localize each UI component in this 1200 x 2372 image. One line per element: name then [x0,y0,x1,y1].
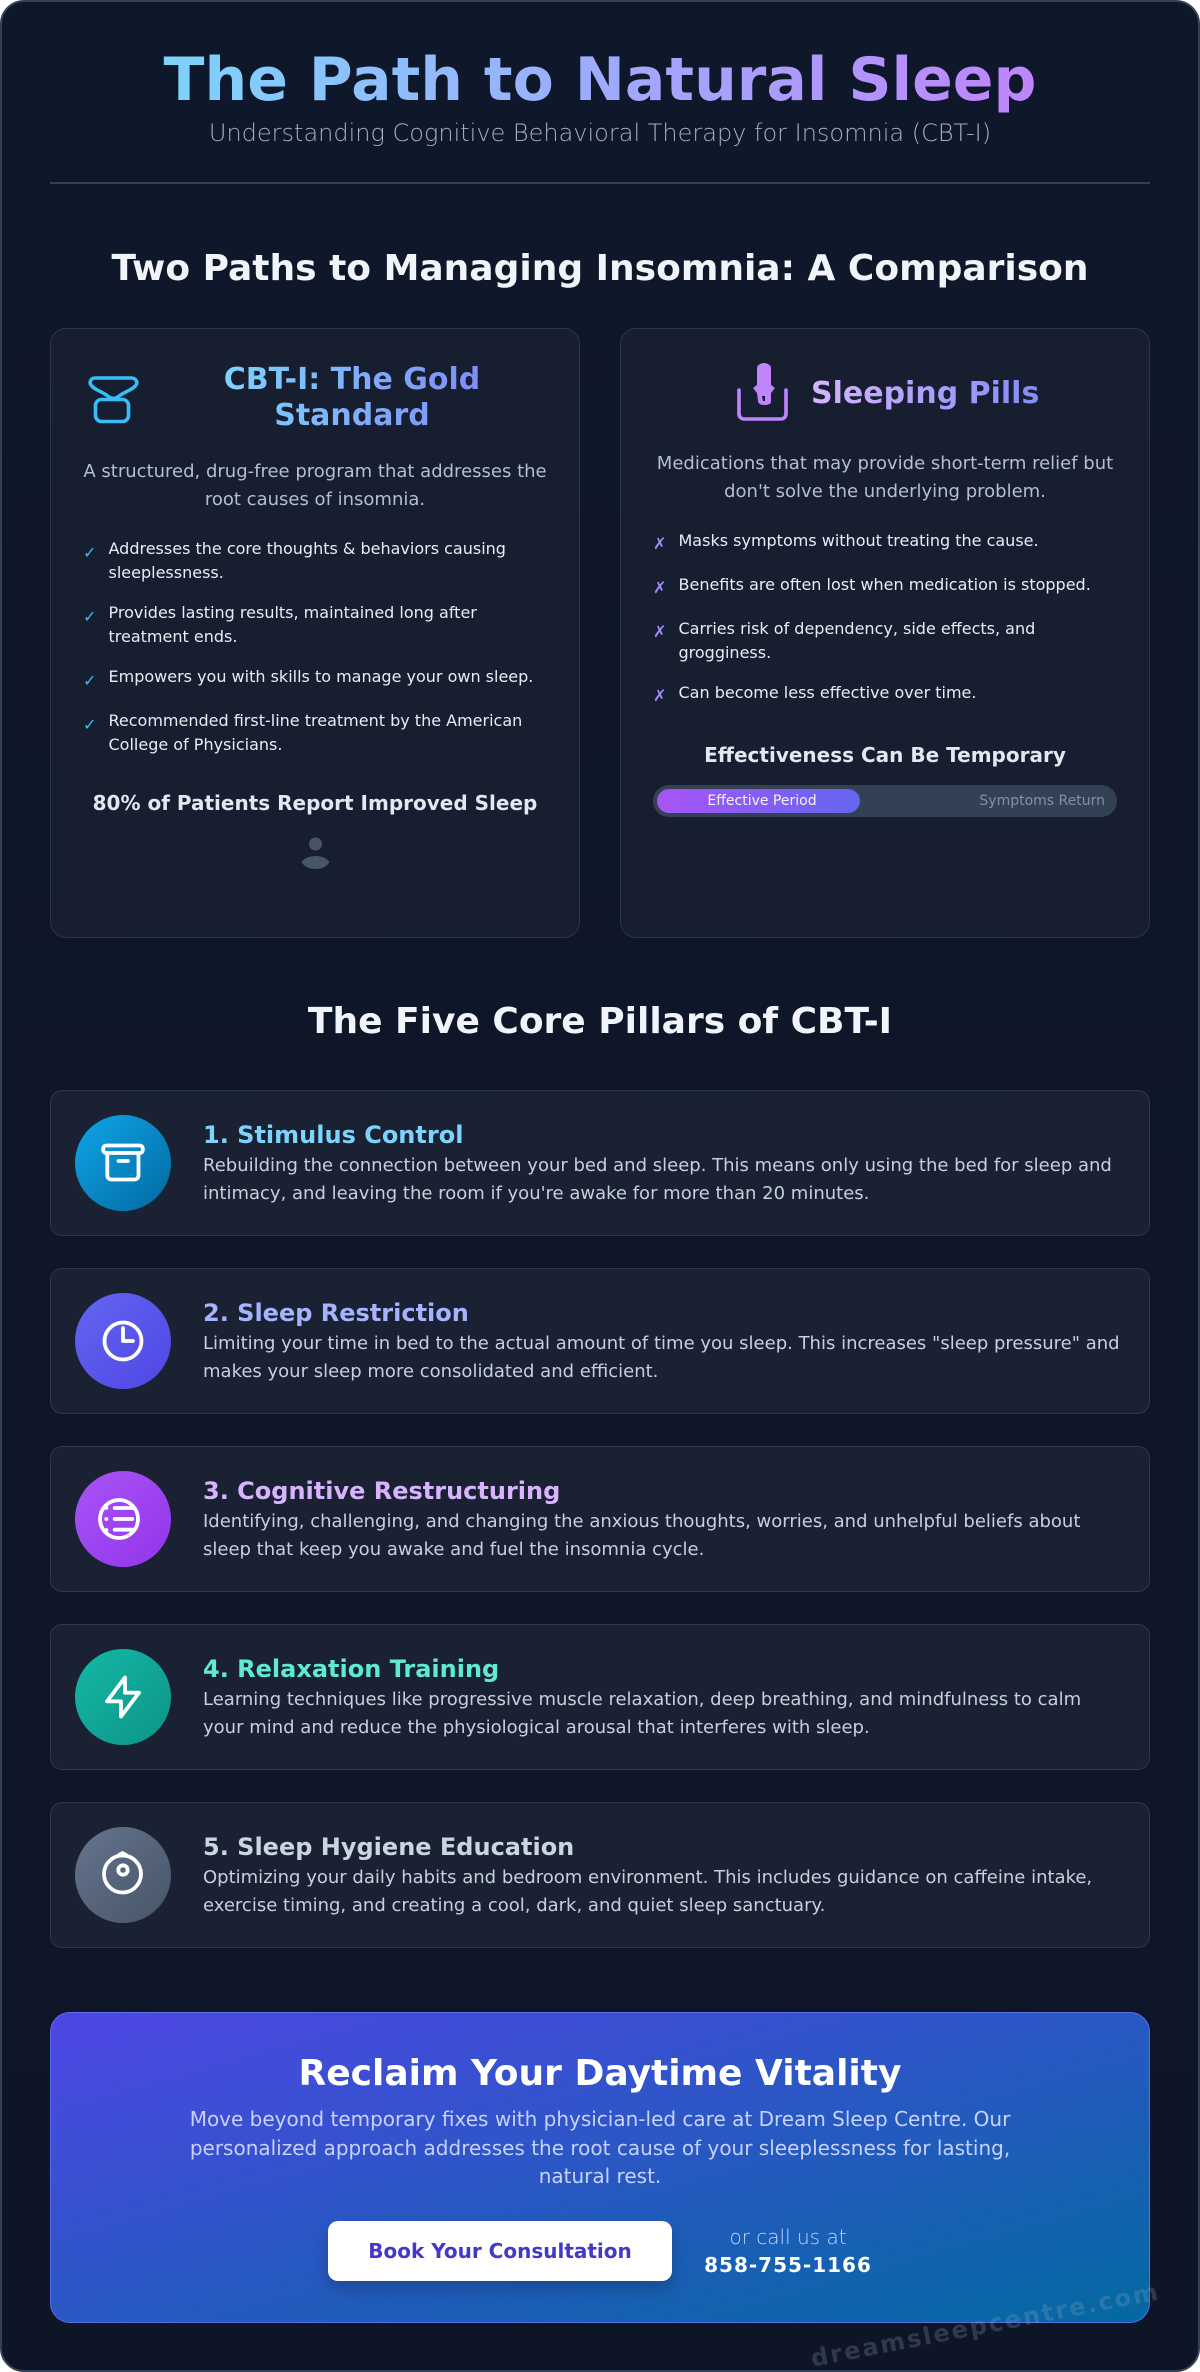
pillar 4 [50,1624,1150,1770]
icon: thought list [75,1471,171,1567]
pillar 1 text [203,1155,1112,1204]
CTA text: natural rest. [539,2164,661,2188]
pillar 1 title: 1. Stimulus Control [203,1121,463,1149]
benefit 2: ✓ [83,607,96,626]
icon: person [302,838,330,869]
benefit 1: sleeplessness. [108,563,224,582]
drawback 3: ✗ [653,622,666,641]
description: CBT-I [83,461,547,510]
pillar 3 text: sleep that keep you awake and fuel the insomnia cycle. [203,1539,704,1560]
title: The Path to Natural Sleep [164,45,1036,115]
drawback 4: Can become less effective over time. [678,683,976,702]
header divider [50,182,1150,184]
effectiveness bar [653,785,1117,817]
effective period fill [657,789,860,813]
benefit 2 [83,603,477,646]
drawback 1: Masks symptoms without treating the cause. [678,531,1039,550]
benefit 4 [83,711,522,754]
pillar 4 title: 4. Relaxation Training [203,1655,499,1683]
benefit 4: College of Physicians. [108,735,282,754]
pillar 5 [50,1802,1150,1948]
panel: sleeping pills [620,328,1150,938]
pillar 1 text: intimacy, and leaving the room if you're awake for more than 20 minutes. [203,1183,869,1204]
description: CBT-I: A structured, drug-free program that addresses the [83,461,547,482]
drawback 3 [653,619,1035,662]
CTA heading: Reclaim Your Daytime Vitality [299,2053,901,2094]
pillar 2 [50,1268,1150,1414]
drawback 3: Carries risk of dependency, side effects, and [678,619,1035,638]
pillar 3 title: 3. Cognitive Restructuring [203,1477,560,1505]
subtitle: Understanding Cognitive Behavioral Therapy for Insomnia (CBT-I) [209,119,991,147]
effectiveness label: Effectiveness Can Be Temporary [704,743,1066,767]
description: sleeping pills: Medications that may provide short-term relief but [657,453,1113,474]
benefit 2: Provides lasting results, maintained long after [108,603,477,622]
effective period fill: Effective Period [707,793,817,809]
benefit 1: ✓ [83,543,96,562]
pillar 3 [50,1446,1150,1592]
pillar 4 text: Learning techniques like progressive muscle relaxation, deep breathing, and mindfulness to calm [203,1689,1081,1710]
pillar 4 text: your mind and reduce the physiological arousal that interferes with sleep. [203,1717,870,1738]
drawback 3: grogginess. [678,643,771,662]
pillar 4 text [203,1689,1081,1738]
icon: lightning bolt [75,1649,171,1745]
stat: 80 percent: 80% of Patients Report Improved Sleep [93,791,537,815]
pillar 5 title: 5. Sleep Hygiene Education [203,1833,574,1861]
heading: CBT-I: CBT-I: The Gold [224,362,480,397]
panel: CBT-I [50,328,580,938]
symptoms return label: Symptoms Return [979,793,1105,809]
watermark: dreamsleepcentre.com [809,2277,1162,2372]
pillar 2 title: 2. Sleep Restriction [203,1299,469,1327]
drawback 4: ✗ [653,686,666,705]
pillar 5 text: exercise timing, and creating a cool, dark, and quiet sleep sanctuary. [203,1895,825,1916]
call label: or call us at [729,2225,847,2249]
pillar 5 text [203,1867,1092,1916]
heading: CBT-I [223,362,481,434]
benefit 2: treatment ends. [108,627,237,646]
benefit 3: ✓ [83,671,96,690]
button: book consultation [328,2221,672,2281]
benefit 3: Empowers you with skills to manage your own sleep. [108,667,533,686]
heading: comparison: Two Paths to Managing Insomnia: A Comparison [111,248,1089,289]
icon: bedroom dial [75,1827,171,1923]
phone number: 858-755-1166 [704,2253,872,2277]
icon: pill [737,363,788,421]
pillar 2 text [203,1333,1120,1382]
pillar 1 [50,1090,1150,1236]
pillar 3 text: Identifying, challenging, and changing the anxious thoughts, worries, and unhelpful beliefs about [203,1511,1080,1532]
benefit 1: Addresses the core thoughts & behaviors causing [108,539,506,558]
pillar 3 text [203,1511,1080,1560]
description: sleeping pills: don't solve the underlying problem. [724,481,1046,502]
icon: archive box [75,1115,171,1211]
drawback 1: ✗ [653,534,666,553]
pillar 1 text: Rebuilding the connection between your bed and sleep. This means only using the bed for sleep and [203,1155,1112,1176]
description: sleeping pills [657,453,1113,502]
panel: call to action [50,2012,1150,2323]
benefit 4: Recommended first-line treatment by the American [108,711,522,730]
benefit 1 [83,539,506,582]
icon: CBT-I [88,376,139,424]
phone block [704,2225,872,2277]
heading: sleeping pills: Sleeping Pills [811,376,1039,411]
CTA text: Move beyond temporary fixes with physician-led care at Dream Sleep Centre. Our [190,2107,1010,2131]
heading: pillars: The Five Core Pillars of CBT-I [308,1001,892,1042]
drawback 2: Benefits are often lost when medication is stopped. [678,575,1091,594]
description: CBT-I: root causes of insomnia. [205,489,425,510]
pillar 5 text: Optimizing your daily habits and bedroom environment. This includes guidance on caffeine intake, [203,1867,1092,1888]
benefit 4: ✓ [83,715,96,734]
heading: CBT-I: Standard [274,398,430,433]
drawback 2: ✗ [653,578,666,597]
icon: clock [75,1293,171,1389]
CTA text [190,2107,1010,2188]
pillar 2 text: makes your sleep more consolidated and efficient. [203,1361,658,1382]
CTA text: personalized approach addresses the root cause of your sleeplessness for lasting, [190,2136,1010,2160]
pillar 2 text: Limiting your time in bed to the actual amount of time you sleep. This increases "sleep pressure" and [203,1333,1120,1354]
button: book consultation: Book Your Consultation [368,2239,632,2263]
